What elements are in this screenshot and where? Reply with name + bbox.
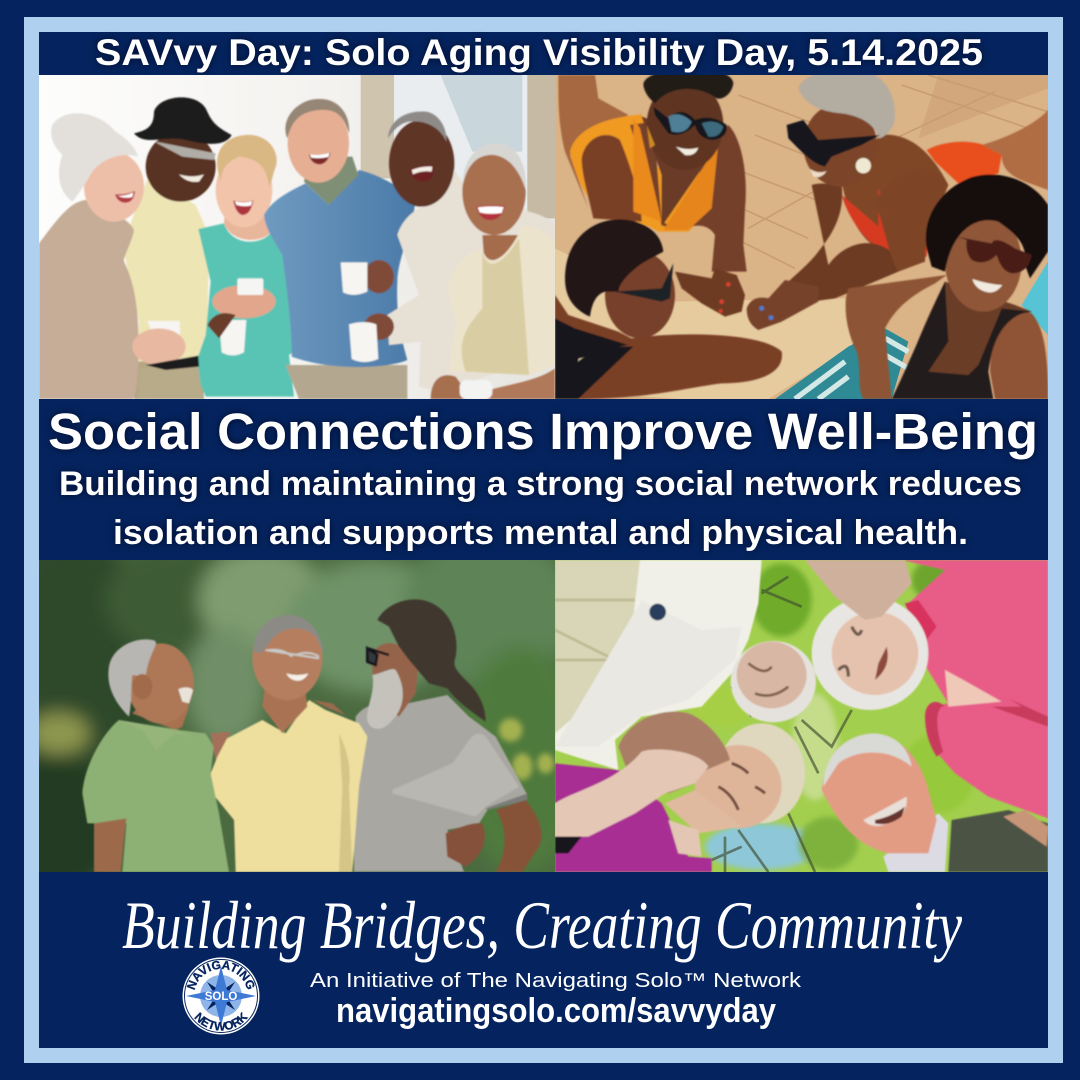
person: man in blue sweater	[264, 99, 415, 399]
pool edge and water	[555, 248, 1048, 399]
person: white cardigan arm	[555, 560, 762, 770]
person: man in black hat	[122, 97, 232, 399]
main heading: Social Connections Improve Well-Being	[48, 403, 1038, 460]
subheading: Building and maintaining a strong social network reduces	[59, 465, 1022, 503]
person: woman in center, distant	[731, 641, 816, 722]
logo text: NAVIGATING	[186, 960, 254, 990]
person: woman in magenta	[555, 712, 805, 872]
person: man in gray polo with beard	[354, 599, 542, 872]
initiative line: An Initiative of The Navigating Solo™ Network	[310, 970, 802, 992]
person: woman with gray afro	[785, 70, 1048, 302]
website url: navigatingsolo.com/savvyday	[336, 992, 776, 1030]
logo text	[186, 960, 254, 1031]
person: man with argyle vest	[822, 733, 1048, 872]
person: man in green polo	[82, 639, 231, 872]
subheading	[59, 465, 1022, 552]
person: man in yellow polo	[211, 615, 367, 872]
person: woman with dark hair, lower left	[555, 219, 782, 399]
person: woman with white hair	[39, 113, 144, 399]
person: woman in pink jacket	[805, 560, 1048, 818]
hands	[675, 268, 818, 330]
subheading: isolation and supports mental and physical health.	[113, 514, 968, 552]
logo: Navigating Solo Network compass badge	[182, 958, 260, 1034]
photo: three men laughing in a garden	[39, 560, 555, 872]
photo: seniors in a circle seen from below	[555, 560, 1048, 872]
person: woman in orange swimsuit	[558, 68, 747, 272]
person: man in cream polo	[364, 111, 555, 392]
person: woman with short white hair	[431, 143, 555, 399]
mugs	[147, 262, 378, 362]
person: woman in teal sweater	[197, 134, 295, 398]
top banner title: SAVvy Day: Solo Aging Visibility Day, 5.14.2025	[95, 32, 983, 73]
photo: six laughing seniors with mugs	[39, 75, 555, 399]
person: woman in black swimsuit with afro	[846, 175, 1048, 399]
logo text: NETWORK	[194, 1012, 248, 1031]
logo text: SOLO	[205, 991, 237, 1003]
photo: four women at poolside	[555, 68, 1048, 399]
